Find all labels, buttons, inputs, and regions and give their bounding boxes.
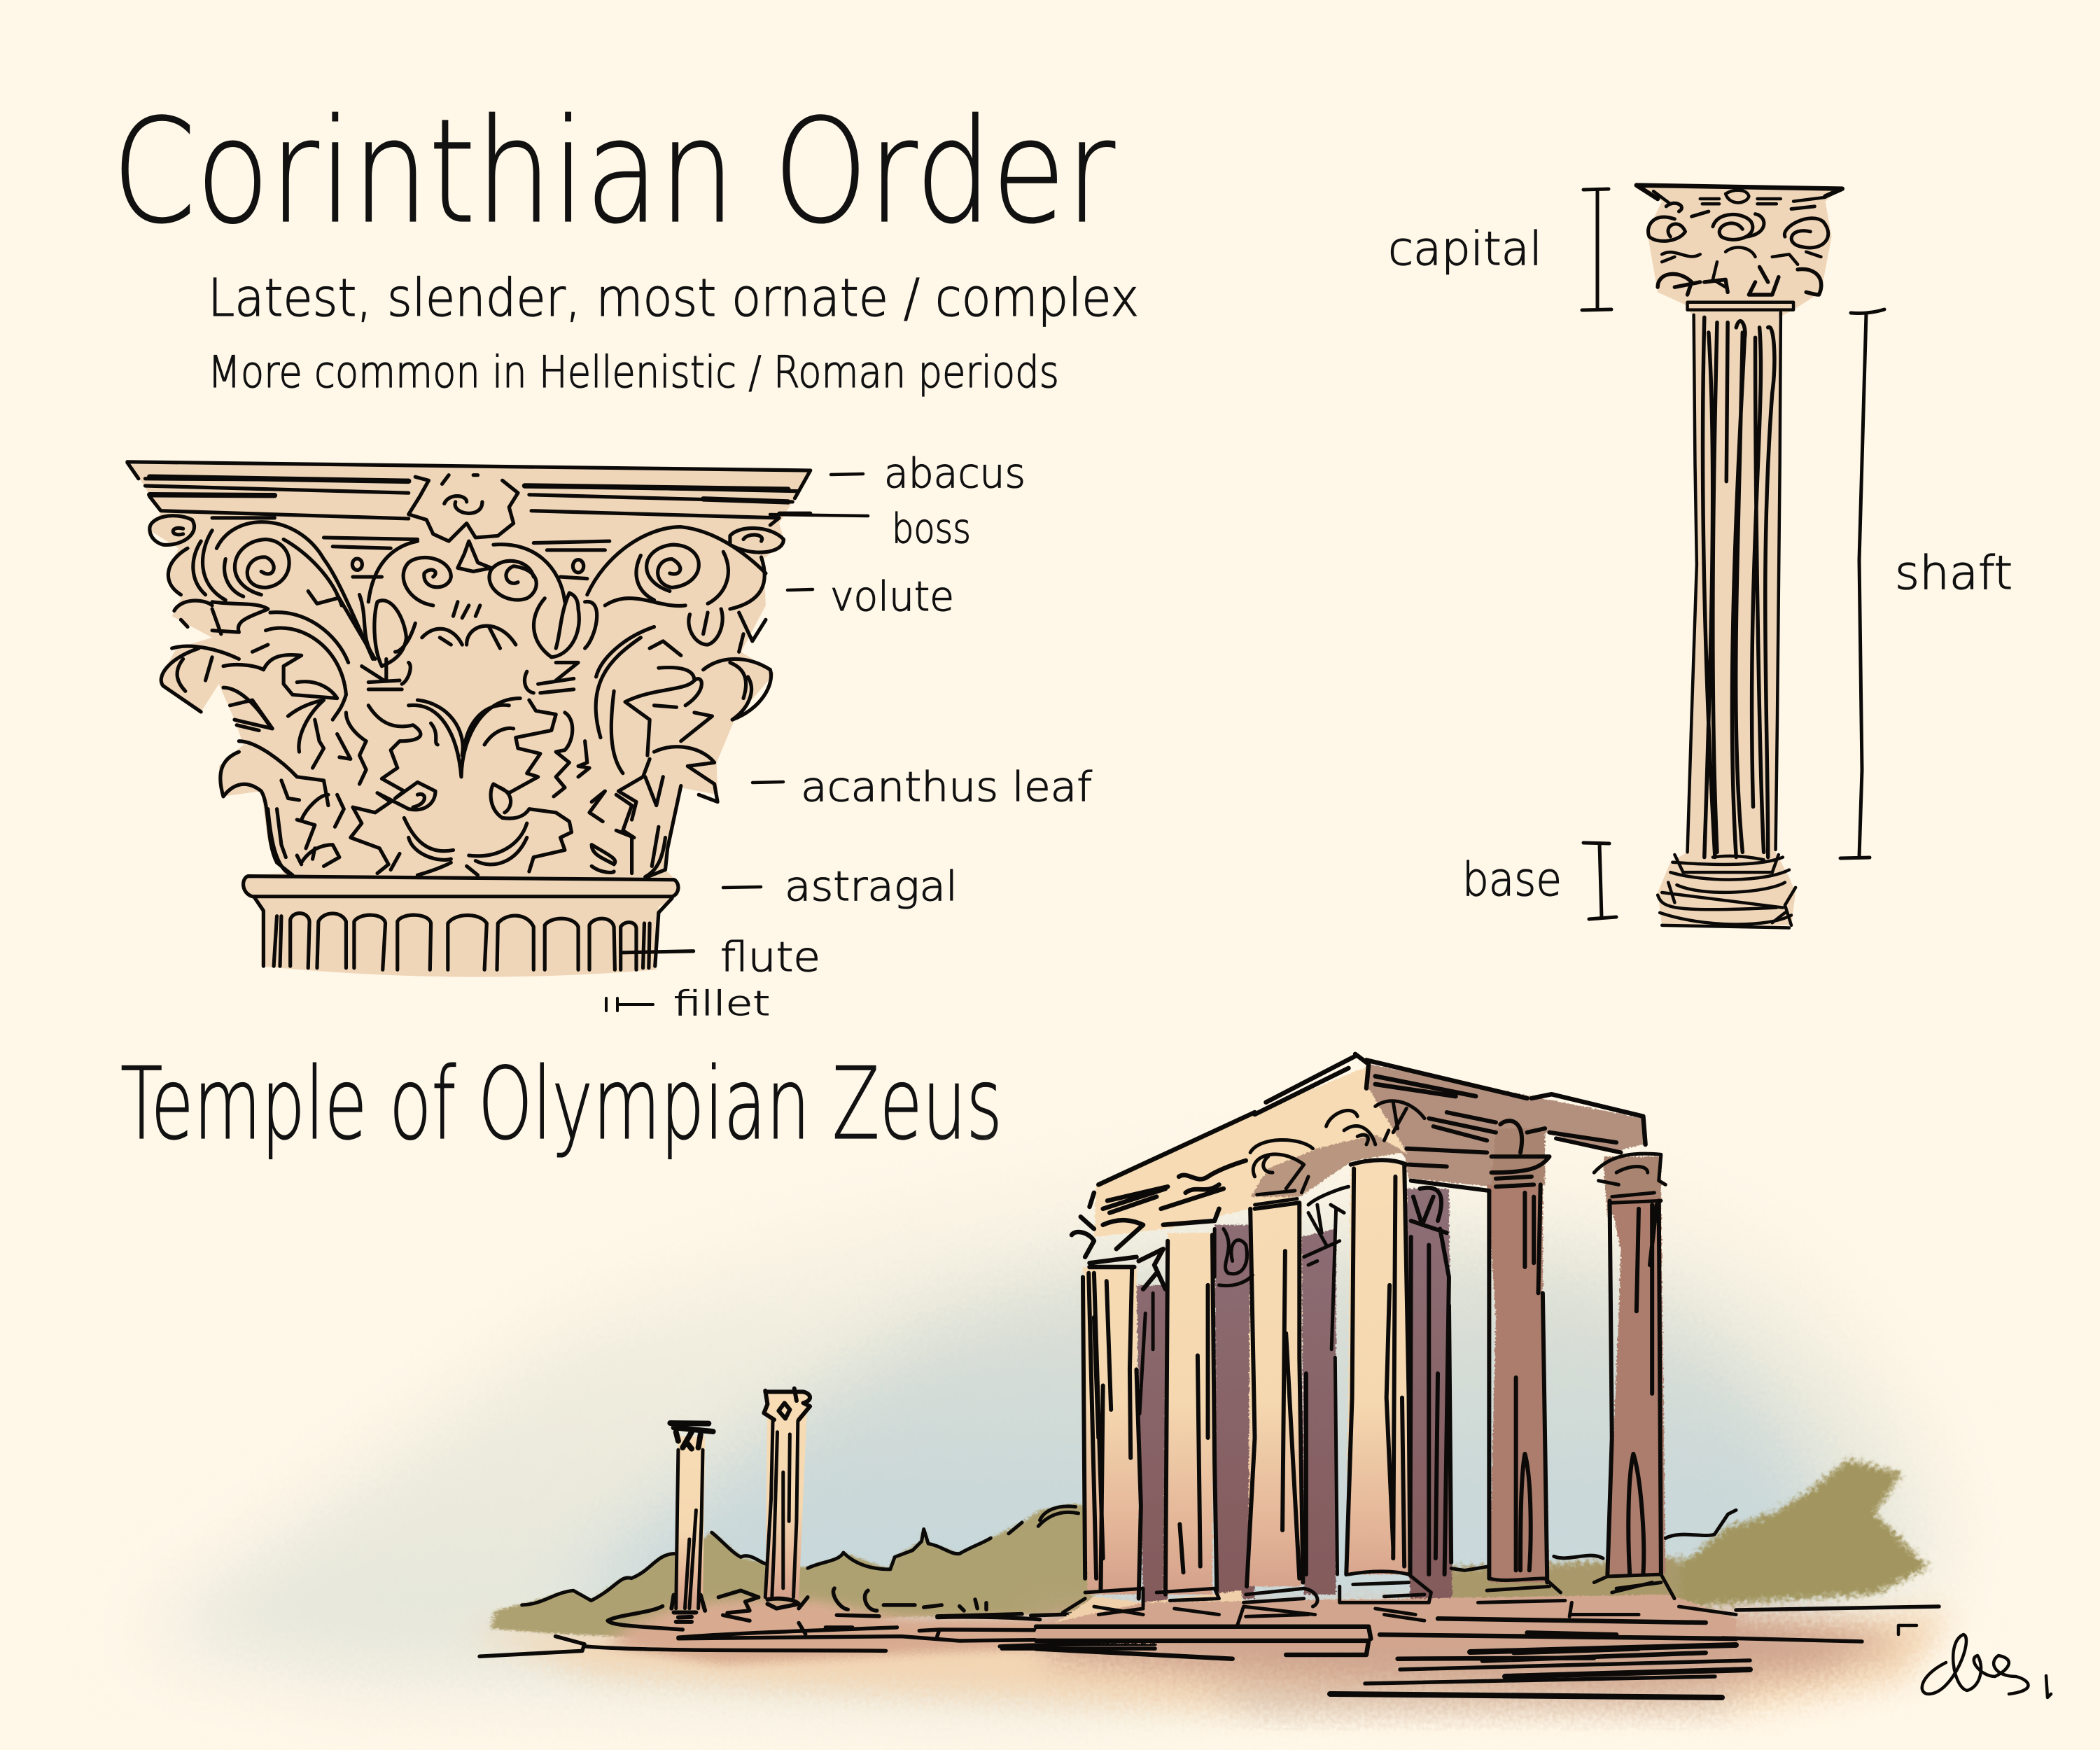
label: abacus: abacus bbox=[884, 449, 1026, 497]
hills bbox=[491, 1504, 1093, 1637]
middle tulips bbox=[360, 595, 415, 690]
small columns bbox=[670, 1388, 810, 1622]
bracket: shaft: shaft bbox=[1895, 546, 2012, 600]
flutes bbox=[274, 913, 650, 969]
base bbox=[1658, 855, 1795, 927]
subtitle line 1: Latest, slender, most ornate / complex bbox=[208, 268, 1139, 328]
label: fillet: fillet bbox=[673, 984, 770, 1023]
front columns bbox=[1083, 1163, 1409, 1595]
bottom left leaf curves bbox=[268, 809, 665, 877]
far columns bbox=[1487, 1184, 1665, 1583]
bracket: capital: capital bbox=[1388, 222, 1542, 276]
center palmette bbox=[409, 699, 520, 777]
dark columns bbox=[1137, 1189, 1452, 1602]
left volute bbox=[216, 522, 373, 659]
bracket: shaft bbox=[1840, 309, 2012, 858]
label: flute: flute bbox=[720, 933, 820, 981]
sky wash bbox=[140, 1148, 1935, 1701]
label: volute: volute bbox=[830, 573, 954, 620]
main temple bbox=[1036, 1054, 1736, 1661]
label: fillet bbox=[606, 984, 770, 1023]
diagram: full column bbox=[1637, 186, 1842, 927]
bracket: capital bbox=[1388, 189, 1611, 310]
title: Corinthian Order: Corinthian Order bbox=[112, 89, 1116, 255]
bracket: base bbox=[1462, 843, 1616, 919]
right volute bbox=[587, 527, 766, 600]
ground lines left bbox=[479, 1506, 1155, 1656]
heading: Temple of Olympian Zeus: Temple of Olympian Zeus bbox=[120, 1046, 1002, 1162]
bracket: base: base bbox=[1462, 853, 1562, 906]
boss bbox=[409, 475, 518, 541]
label: boss: boss bbox=[892, 505, 971, 552]
ground pink bbox=[611, 1600, 1214, 1664]
illustration: temple scene bbox=[140, 1148, 1953, 1715]
temple side entablature bbox=[1368, 1064, 1643, 1186]
signature bbox=[1898, 1625, 2051, 1698]
subtitle line 2: More common in Hellenistic / Roman periods bbox=[208, 346, 1059, 398]
stylobate bbox=[1036, 1590, 1246, 1631]
left leaves bbox=[174, 601, 349, 720]
right ground lines bbox=[1330, 1606, 1939, 1698]
label: acanthus leaf: acanthus leaf bbox=[801, 763, 1093, 811]
label lines and names bbox=[606, 449, 1093, 1023]
astragal bbox=[244, 876, 678, 897]
temple ink bbox=[1036, 1054, 1736, 1661]
diagram: Corinthian capital bbox=[127, 462, 811, 977]
center volutes bbox=[368, 541, 565, 606]
temple pediment face bbox=[1094, 1066, 1406, 1237]
label: astragal: astragal bbox=[785, 862, 958, 910]
ground wash bbox=[462, 1610, 1953, 1708]
